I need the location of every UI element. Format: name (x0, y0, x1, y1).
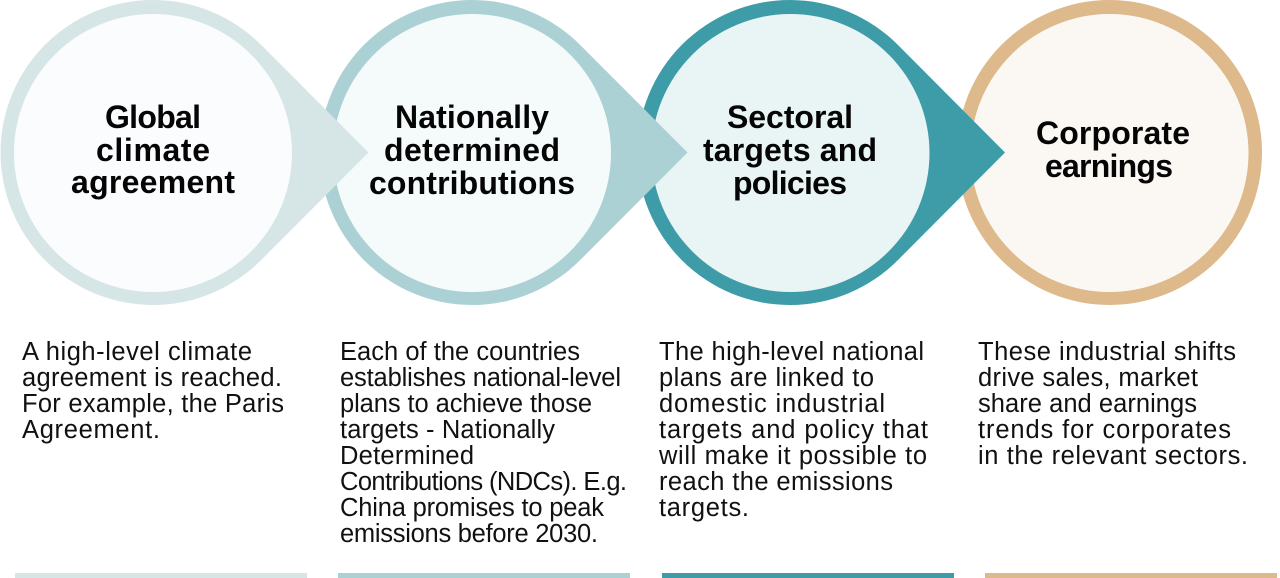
text block: corporate earnings description: drive sales, market (978, 364, 1198, 392)
bottom bar: step 3 (662, 573, 954, 578)
text block: nationally determined contributions description: targets - Nationally (340, 416, 555, 444)
step 1: global climate agreement arrow circle (1, 0, 369, 305)
text block: corporate earnings description (978, 338, 1248, 470)
text block: nationally determined contributions description: Contributions (NDCs). E.g. (340, 468, 627, 496)
heading: global climate agreement: agreement (71, 164, 235, 200)
heading: corporate earnings (1036, 115, 1190, 184)
text block: corporate earnings description: in the relevant sectors. (978, 442, 1248, 470)
text block: nationally determined contributions description: plans to achieve those (340, 390, 592, 418)
text block: sectoral targets description: plans are linked to (659, 364, 874, 392)
step 2: nationally determined contributions arrow circle (320, 0, 688, 305)
heading: sectoral targets and policies: targets and (703, 132, 877, 168)
text block: nationally determined contributions description: China promises to peak (340, 494, 604, 522)
bottom bar: step 1 (15, 573, 307, 578)
bottom bar: step 4 (985, 573, 1277, 578)
text block: sectoral targets description: The high-level national (659, 338, 924, 366)
text block: nationally determined contributions description: Determined (340, 442, 474, 470)
step 4: corporate earnings circle (957, 0, 1262, 305)
text block: nationally determined contributions description (340, 338, 627, 548)
text block: sectoral targets description: domestic industrial (659, 390, 885, 418)
heading: global climate agreement (71, 99, 235, 200)
heading: global climate agreement: Global (105, 99, 201, 135)
text block: global climate agreement description: A high-level climate (22, 338, 252, 366)
text block: nationally determined contributions description: establishes national-level (340, 364, 621, 392)
text block: global climate agreement description (22, 338, 284, 444)
text block: corporate earnings description: share and earnings (978, 390, 1197, 418)
text block: sectoral targets description (658, 338, 928, 522)
text block: corporate earnings description: trends for corporates (978, 416, 1231, 444)
step 3: sectoral targets arrow circle (637, 0, 1005, 305)
heading: nationally determined contributions: contributions (369, 165, 575, 201)
heading: corporate earnings: Corporate (1036, 115, 1190, 151)
text block: sectoral targets description: targets and policy that (659, 416, 928, 444)
heading: corporate earnings: earnings (1045, 148, 1173, 184)
heading: nationally determined contributions: determined (384, 132, 560, 168)
heading: sectoral targets and policies: policies (733, 165, 847, 201)
text block: nationally determined contributions description: emissions before 2030. (340, 520, 598, 548)
heading: sectoral targets and policies: Sectoral (727, 99, 853, 135)
text block: sectoral targets description: will make it possible to (658, 442, 927, 470)
text block: nationally determined contributions description: Each of the countries (340, 338, 580, 366)
heading: nationally determined contributions: Nationally (395, 99, 549, 135)
text block: sectoral targets description: reach the emissions (659, 468, 893, 496)
heading: sectoral targets and policies (703, 99, 877, 201)
heading: nationally determined contributions (369, 99, 575, 201)
text block: sectoral targets description: targets. (659, 494, 749, 522)
text block: global climate agreement description: For example, the Paris (22, 390, 284, 418)
text block: corporate earnings description: These industrial shifts (978, 338, 1236, 366)
heading: global climate agreement: climate (96, 132, 210, 168)
bottom bar: step 2 (338, 573, 630, 578)
text block: global climate agreement description: Agreement. (22, 416, 160, 444)
text block: global climate agreement description: agreement is reached. (22, 364, 282, 392)
